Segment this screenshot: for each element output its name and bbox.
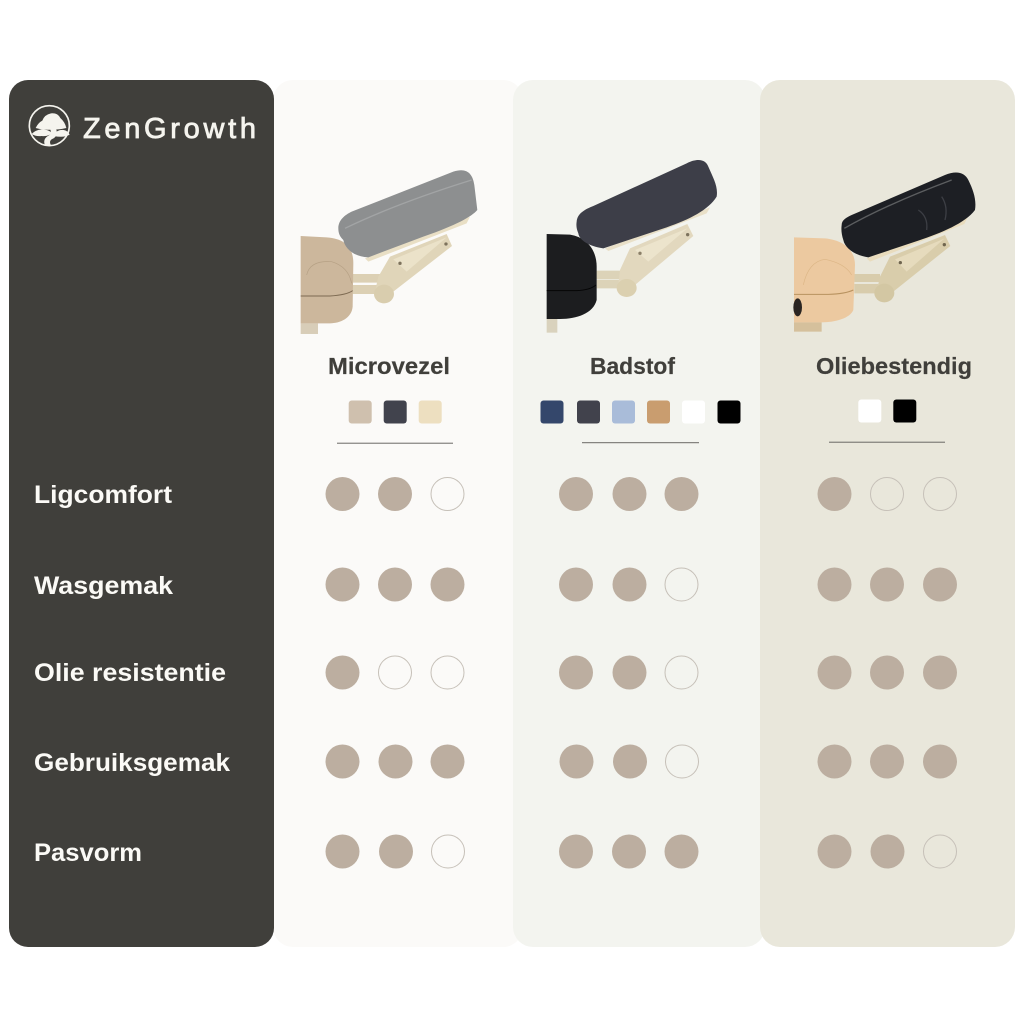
label: Pasvorm: Pasvorm (34, 839, 142, 867)
panel: criteria sidebar (9, 80, 274, 947)
heading: Oliebestendig: Oliebestendig (816, 353, 972, 379)
ratings: badstof (559, 477, 698, 868)
label: Ligcomfort: Ligcomfort (34, 481, 173, 509)
colour swatches: microvezel (349, 400, 442, 424)
heading: Badstof: Badstof (590, 353, 675, 379)
colour swatches: badstof (540, 400, 740, 424)
product image: badstof cushion (547, 160, 717, 333)
heading: Microvezel: Microvezel (328, 353, 450, 379)
logo: ZenGrowth (29, 106, 256, 146)
icon: bonsai tree (29, 106, 70, 146)
colour swatches: oliebestendig (858, 400, 916, 422)
panel: badstof column (513, 80, 765, 947)
ratings: microvezel (326, 477, 464, 868)
panel: oliebestendig column (760, 80, 1015, 947)
ratings: oliebestendig (818, 477, 957, 868)
label: Wasgemak: Wasgemak (34, 572, 173, 600)
panel: microvezel column (273, 80, 523, 947)
label: Olie resistentie: Olie resistentie (34, 659, 226, 687)
label: Gebruiksgemak: Gebruiksgemak (34, 749, 230, 777)
logo wordmark: ZenGrowth (83, 113, 256, 145)
product image: oliebestendig cushion (793, 172, 975, 332)
product image: microvezel cushion (301, 170, 477, 334)
